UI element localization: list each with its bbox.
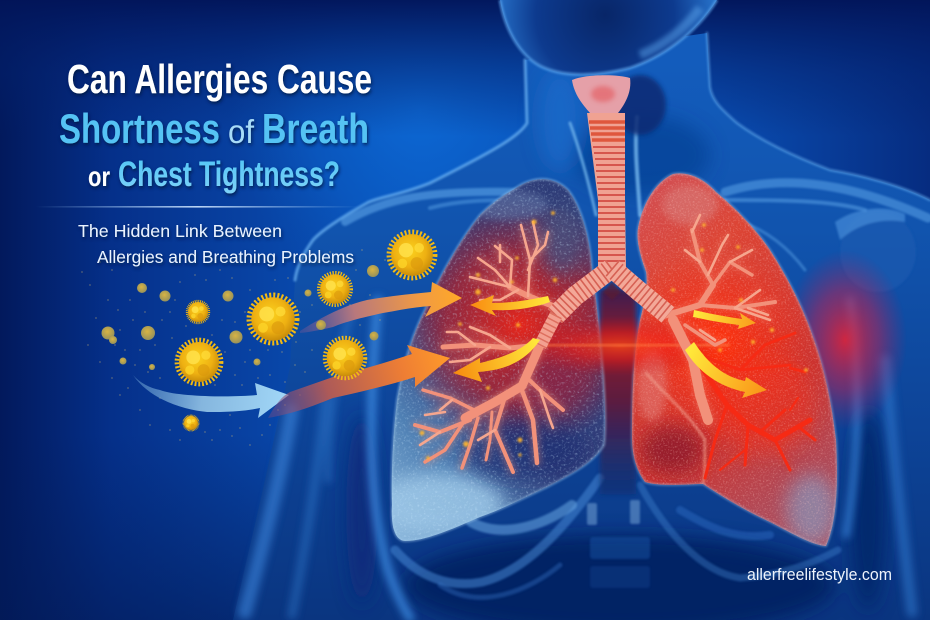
bronchial tree: right lung xyxy=(667,215,815,478)
body highlights xyxy=(295,33,930,280)
central red flare xyxy=(515,316,730,376)
arrow: large blue airflow xyxy=(133,375,289,418)
airborne dust xyxy=(82,250,385,445)
throat shadow xyxy=(614,75,666,135)
ribs and diaphragm xyxy=(395,478,838,597)
title: Chest Tightness? xyxy=(118,155,340,194)
title: of xyxy=(228,113,255,150)
arrow: left upper yellow xyxy=(470,295,550,316)
title: Shortness xyxy=(59,105,220,152)
arrow: right lower yellow xyxy=(685,342,767,398)
torso silhouette xyxy=(233,33,930,620)
pollen: large xyxy=(389,232,435,278)
dark gaps and lower torso shade xyxy=(346,70,886,620)
title: Breath xyxy=(262,105,369,152)
left lung xyxy=(375,170,610,545)
main bronchi xyxy=(540,268,668,346)
pollen: small and dull xyxy=(102,265,379,370)
website url: allerfreelifestyle.com xyxy=(747,565,892,584)
carina notch xyxy=(603,282,621,300)
subtitle xyxy=(78,221,354,267)
arrows: yellow, inside lungs xyxy=(453,295,767,398)
subtitle: Allergies and Breathing Problems xyxy=(97,247,354,267)
pollen particles xyxy=(102,232,435,431)
arrow: left lower yellow xyxy=(453,338,540,382)
larynx and trachea xyxy=(572,75,630,268)
divider xyxy=(35,206,360,208)
shoulder joint xyxy=(835,208,916,292)
title: Can Allergies Cause xyxy=(67,56,372,102)
arrow: upper orange xyxy=(300,282,462,333)
neck tendons xyxy=(570,117,640,215)
red glow right of lung xyxy=(783,250,907,430)
arm ribbons xyxy=(245,300,912,618)
title xyxy=(59,56,372,194)
arrow: right upper yellow xyxy=(693,310,756,329)
head xyxy=(500,0,717,75)
subtitle: The Hidden Link Between xyxy=(78,221,282,241)
right lung xyxy=(630,170,840,550)
bronchial tree: left lung xyxy=(415,222,563,472)
arrow: lower orange xyxy=(268,345,450,418)
glowing particles xyxy=(420,211,808,460)
spine xyxy=(587,290,650,588)
title: or xyxy=(88,161,110,192)
